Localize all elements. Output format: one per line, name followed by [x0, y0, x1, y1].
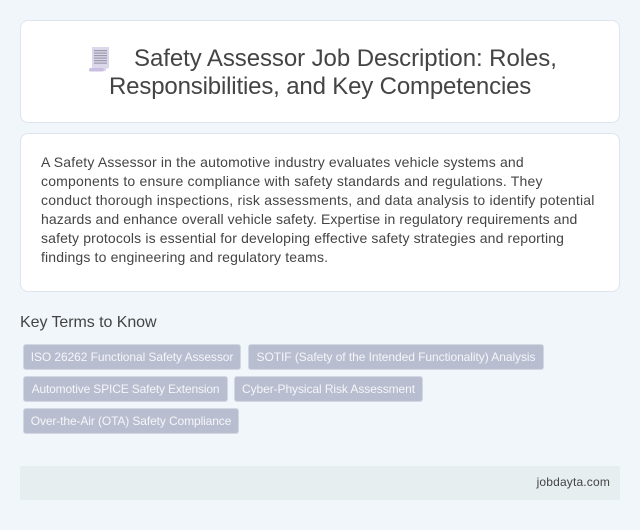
- panel: description card: [20, 133, 620, 292]
- tag: Automotive SPICE: [23, 376, 228, 402]
- text block: description: findings to engineering and regulatory teams.: [41, 249, 328, 265]
- title: Safety Assessor Job Description: Roles,: [134, 45, 557, 72]
- panel: title card: [20, 20, 620, 123]
- tag: OTA: [23, 408, 239, 434]
- tag: ISO 26262: [23, 344, 241, 370]
- tag: ISO 26262: ISO 26262 Functional Safety Assessor: [31, 350, 233, 364]
- text block: description: conduct thorough inspections, risk assessments, and data analysis to identify potential: [41, 192, 595, 208]
- text block: description: A Safety Assessor in the automotive industry evaluates vehicle systems and: [41, 154, 524, 170]
- panel: key term tags: [23, 344, 544, 434]
- title: [109, 45, 557, 100]
- tag: SOTIF: [248, 344, 544, 370]
- text block: description: safety protocols is essential for developing effective safety strategies and reporting: [41, 230, 564, 246]
- tag: Cyber-Physical: Cyber-Physical Risk Assessment: [242, 382, 415, 396]
- tag: SOTIF: SOTIF (Safety of the Intended Functionality) Analysis: [257, 350, 535, 364]
- text block: description: components to ensure compliance with safety standards and regulations. They: [41, 173, 543, 189]
- tag: Automotive SPICE: Automotive SPICE Safety Extension: [32, 382, 219, 396]
- heading: key terms: Key Terms to Know: [20, 314, 157, 331]
- icon: document: [89, 47, 109, 72]
- tag: Cyber-Physical: [234, 376, 423, 402]
- footer bar: [20, 466, 620, 500]
- footer: source: jobdayta.com: [537, 475, 610, 489]
- title: Responsibilities, and Key Competencies: [109, 73, 531, 100]
- tag: OTA: Over-the-Air (OTA) Safety Compliance: [31, 414, 231, 428]
- text block: description: [41, 154, 595, 265]
- text block: description: hazards and enhance overall vehicle safety. Expertise in regulatory requirements and: [41, 211, 577, 227]
